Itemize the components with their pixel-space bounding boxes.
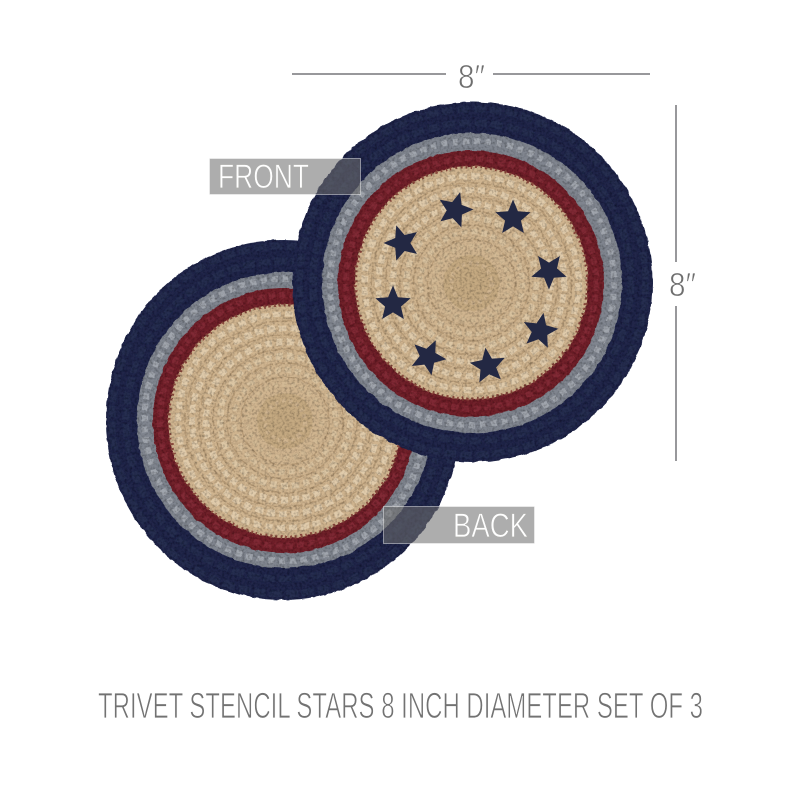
- label: BACK: BACK: [453, 507, 528, 545]
- height dimension: 8 inches: 8″: [669, 266, 696, 303]
- width dimension: 8 inches: 8″: [458, 58, 485, 95]
- back trivet: [106, 240, 460, 600]
- front trivet: [292, 102, 652, 462]
- label: FRONT: FRONT: [218, 158, 309, 196]
- label: BACK: [384, 506, 534, 545]
- braided rings: [292, 102, 652, 462]
- ring of eight navy stars: [375, 187, 574, 383]
